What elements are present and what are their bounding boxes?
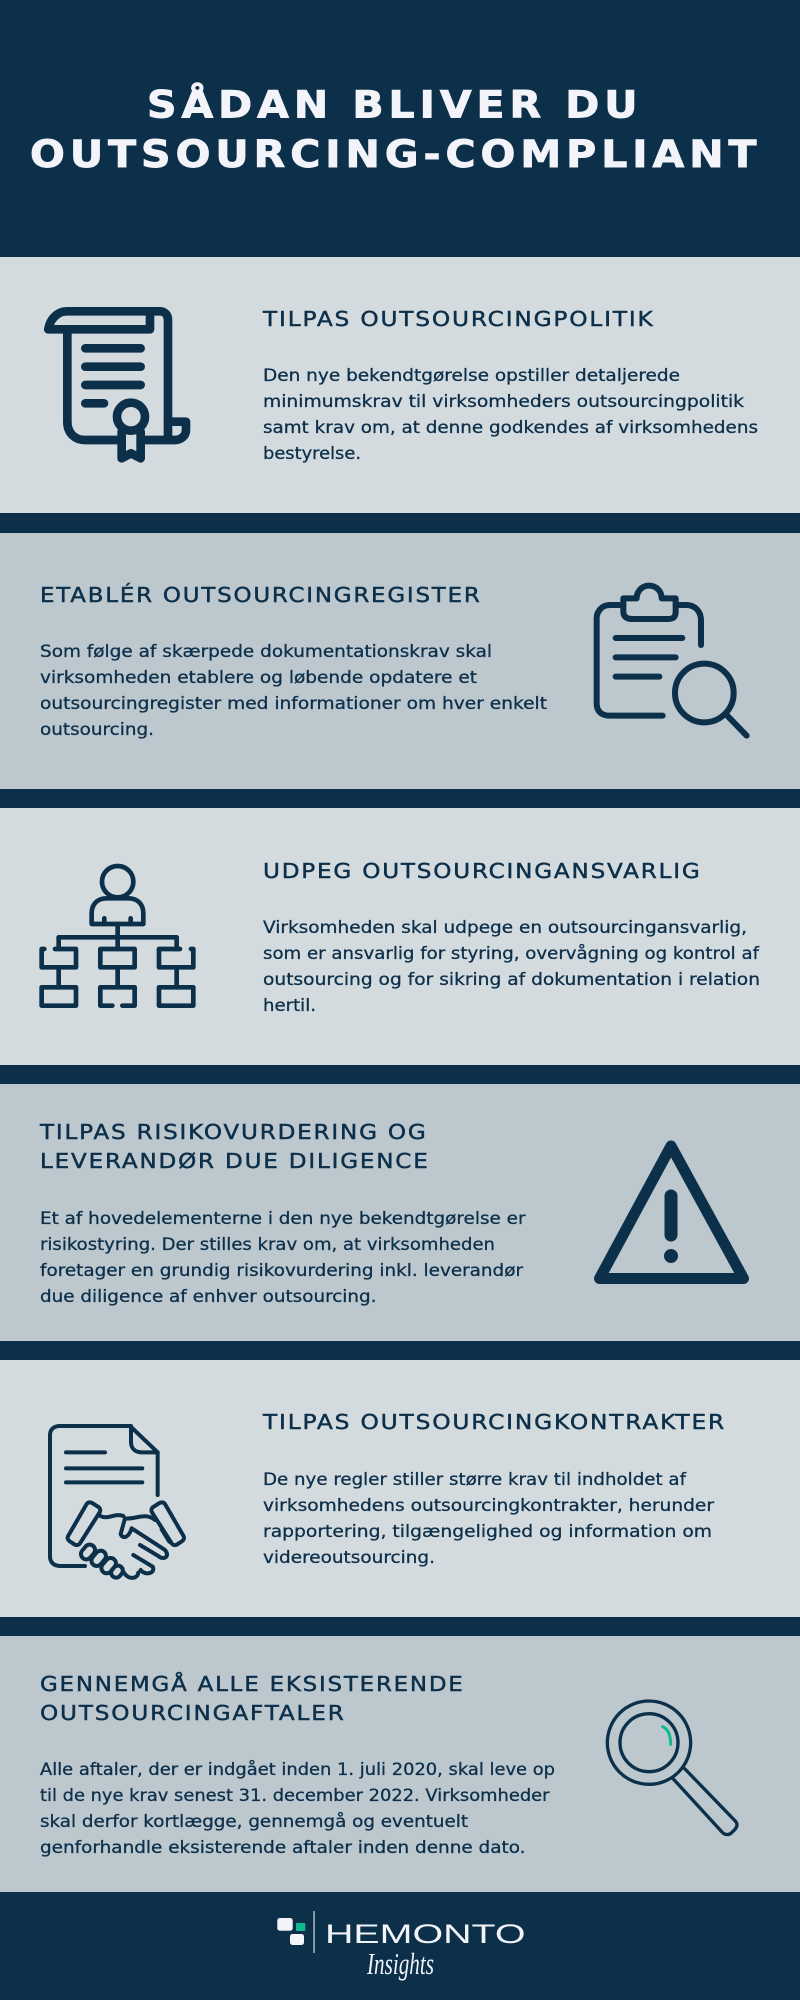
body text: outsourcing. xyxy=(40,720,154,740)
body text: til de nye krav senest 31. december 2022. Virksomheder xyxy=(40,1786,550,1806)
body text: hertil. xyxy=(263,996,316,1016)
heading: TILPAS OUTSOURCINGKONTRAKTER xyxy=(262,1410,726,1434)
body text xyxy=(263,366,758,464)
body text xyxy=(40,1759,555,1858)
body text: minimumskrav til virksomheders outsourcingpolitik xyxy=(263,392,744,412)
footer logo xyxy=(277,1911,526,1981)
body text: risikostyring. Der stilles krav om, at virksomheden xyxy=(40,1235,495,1255)
body text: foretager en grundig risikovurdering inkl. leverandør xyxy=(40,1261,524,1281)
body text: som er ansvarlig for styring, overvågning og kontrol af xyxy=(263,943,760,964)
icon: contract and handshake xyxy=(50,1426,184,1580)
panel: tilpas outsourcingpolitik xyxy=(0,257,800,513)
panel: etablér outsourcingregister xyxy=(0,533,800,789)
body text: rapportering, tilgængelighed og information om xyxy=(263,1522,712,1542)
panel: tilpas risikovurdering og leverandør due diligence xyxy=(0,1084,800,1341)
title: SÅDAN BLIVER DU xyxy=(147,82,642,126)
heading: TILPAS RISIKOVURDERING OG xyxy=(39,1120,428,1144)
body text xyxy=(40,1209,526,1307)
body text: outsourcing og for sikring af dokumentation i relation xyxy=(263,970,760,990)
heading: LEVERANDØR DUE DILIGENCE xyxy=(40,1149,430,1173)
panel: udpeg outsourcingansvarlig xyxy=(0,808,800,1065)
heading: TILPAS OUTSOURCINGPOLITIK xyxy=(262,307,655,331)
panel background xyxy=(0,1084,800,1341)
body text: De nye regler stiller større krav til indholdet af xyxy=(263,1470,687,1490)
panel: tilpas outsourcingkontrakter xyxy=(0,1360,800,1617)
body text: due diligence af enhver outsourcing. xyxy=(40,1287,376,1307)
icon: scroll certificate xyxy=(48,311,186,458)
panel background xyxy=(0,257,800,513)
body text: Virksomheden skal udpege en outsourcingansvarlig, xyxy=(263,918,747,938)
panel background xyxy=(0,533,800,789)
panel background xyxy=(0,1360,800,1617)
body text: genforhandle eksisterende aftaler inden denne dato. xyxy=(40,1838,526,1858)
body text: Alle aftaler, der er indgået inden 1. juli 2020, skal leve op xyxy=(40,1759,555,1780)
tagline: Insights xyxy=(366,1946,434,1981)
icon: clipboard with magnifier xyxy=(597,586,747,736)
brand name: HEMONTO xyxy=(325,1919,526,1949)
icon: magnifying glass xyxy=(607,1701,737,1835)
body text: virksomheden etablere og løbende opdatere et xyxy=(40,668,477,688)
logo mark xyxy=(277,1911,315,1953)
title xyxy=(30,82,762,176)
body text: samt krav om, at denne godkendes af virksomhedens xyxy=(263,418,758,438)
body text xyxy=(40,642,547,740)
body text xyxy=(263,1470,715,1568)
body text: skal derfor kortlægge, gennemgå og eventuelt xyxy=(40,1811,468,1832)
body text: bestyrelse. xyxy=(263,444,361,464)
body text: virksomhedens outsourcingkontrakter, herunder xyxy=(263,1496,715,1516)
icon: warning triangle xyxy=(600,1146,744,1278)
icon: org chart xyxy=(42,866,193,1006)
body text xyxy=(263,918,760,1016)
body text: videreoutsourcing. xyxy=(263,1548,435,1568)
body text: Et af hovedelementerne i den nye bekendtgørelse er xyxy=(40,1209,526,1229)
heading: UDPEG OUTSOURCINGANSVARLIG xyxy=(263,859,702,883)
heading xyxy=(40,1670,465,1725)
panel background xyxy=(0,808,800,1065)
heading: OUTSOURCINGAFTALER xyxy=(40,1701,346,1725)
body text: Den nye bekendtgørelse opstiller detaljerede xyxy=(263,366,680,386)
body text: outsourcingregister med informationer om hver enkelt xyxy=(40,694,547,714)
panel: gennemgå alle eksisterende outsourcingaftaler xyxy=(0,1636,800,1892)
panel background xyxy=(0,1636,800,1892)
title: OUTSOURCING-COMPLIANT xyxy=(30,133,762,176)
heading xyxy=(39,1120,430,1173)
body text: Som følge af skærpede dokumentationskrav skal xyxy=(40,642,492,662)
heading: GENNEMGÅ ALLE EKSISTERENDE xyxy=(40,1670,465,1696)
heading: ETABLÉR OUTSOURCINGREGISTER xyxy=(40,582,482,607)
